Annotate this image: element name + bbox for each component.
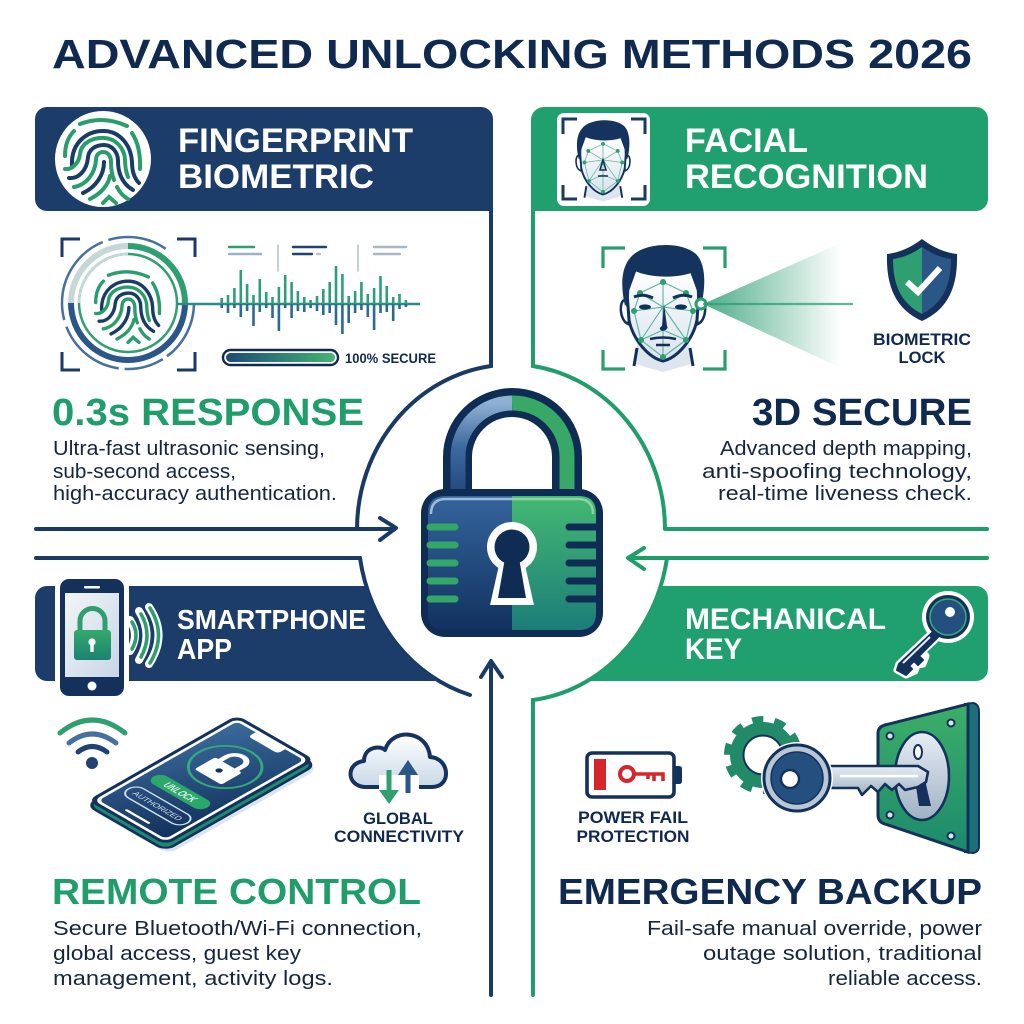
heading: smartphone app: APP <box>177 634 232 666</box>
illustration: face scan <box>603 245 725 372</box>
illustration: isometric smartphone: UNLOCK <box>160 781 200 804</box>
icon: fingerprint badge <box>55 111 151 207</box>
description: mechanical <box>647 918 982 990</box>
panel: fingerprint biometric <box>35 107 493 505</box>
progress bar: 100% secure: 100% SECURE <box>345 351 436 366</box>
heading: fingerprint biometric: BIOMETRIC <box>178 158 374 196</box>
arrow: fingerprint to lock <box>36 518 396 540</box>
description: mechanical: outage solution, traditional <box>703 943 982 965</box>
heading: smartphone app: SMARTPHONE <box>177 604 366 635</box>
icon: wireless waves <box>130 607 158 664</box>
stat: 0.3s response: 0.3s RESPONSE <box>52 392 364 434</box>
heading: fingerprint biometric: FINGERPRINT <box>178 122 413 160</box>
description: fingerprint: Ultra-fast ultrasonic sensing, <box>53 438 325 460</box>
legend: waveform ticks <box>229 245 406 271</box>
illustration: fingerprint scan ring <box>62 237 195 370</box>
illustration: key in lock plate <box>761 703 979 853</box>
description: mechanical: Fail-safe manual override, power <box>647 918 982 940</box>
heading: mechanical key <box>685 603 886 666</box>
heading: smartphone app <box>177 604 366 666</box>
description: facial: anti-spoofing technology, <box>702 461 972 483</box>
description: facial <box>702 438 972 505</box>
heading: mechanical key: MECHANICAL <box>685 603 886 636</box>
header bar: smartphone <box>35 586 439 681</box>
arrow: facial and key to lock <box>628 548 987 569</box>
description: smartphone: global access, guest key <box>53 943 301 965</box>
stat: 3d secure: 3D SECURE <box>752 392 972 434</box>
heading: facial recognition: FACIAL <box>685 122 808 160</box>
icon: battery with red key <box>587 753 682 797</box>
title: ADVANCED UNLOCKING METHODS 2026 <box>52 31 972 77</box>
label: biometric lock: LOCK <box>898 349 946 367</box>
heading: facial recognition: RECOGNITION <box>685 158 928 196</box>
label: biometric lock: BIOMETRIC <box>873 331 971 349</box>
chart: ultrasonic waveform <box>177 266 420 334</box>
header bar: mechanical <box>587 586 988 681</box>
illustration: isometric smartphone: AUTHORIZED <box>130 790 185 822</box>
icon: central padlock <box>421 388 603 637</box>
description: smartphone: Secure Bluetooth/Wi-Fi connection, <box>53 918 422 940</box>
header bar: facial <box>531 107 988 211</box>
arrow: smartphone to lock <box>481 661 502 995</box>
icon: phone with lock <box>55 575 129 700</box>
heading: mechanical key: KEY <box>685 633 742 666</box>
panel: smartphone app <box>35 575 464 990</box>
panel: facial recognition <box>531 107 988 505</box>
line: navy lower <box>36 556 360 560</box>
stat: remote control: REMOTE CONTROL <box>52 871 421 912</box>
progress bar: 100% secure <box>223 350 436 366</box>
icon: wifi signal <box>60 720 125 769</box>
description: smartphone <box>53 918 422 990</box>
label: global connectivity: GLOBAL <box>363 810 433 828</box>
description: smartphone: management, activity logs. <box>53 968 333 990</box>
label: global connectivity <box>334 810 464 846</box>
illustration: scan beam <box>703 243 853 368</box>
description: mechanical: reliable access. <box>828 968 982 990</box>
label: power fail protection <box>576 809 690 846</box>
stat: emergency backup: EMERGENCY BACKUP <box>558 871 982 912</box>
heading: facial recognition <box>685 122 928 196</box>
illustration: isometric smartphone <box>88 715 318 854</box>
description: fingerprint <box>53 438 337 505</box>
icon: cloud sync <box>350 735 446 804</box>
description: facial: Advanced depth mapping, <box>720 438 972 460</box>
heading: fingerprint biometric <box>178 122 413 196</box>
label: power fail protection: PROTECTION <box>576 828 690 846</box>
description: fingerprint: sub-second access, <box>53 461 236 483</box>
label: biometric lock <box>873 331 971 367</box>
connector lines and circle arcs <box>357 210 667 995</box>
description: fingerprint: high-accuracy authentication. <box>53 483 337 505</box>
icon: key on header <box>897 591 974 675</box>
line: green upper <box>667 527 987 531</box>
icon: shield check <box>887 239 957 321</box>
header bar: fingerprint <box>35 107 493 211</box>
icon: gear <box>728 720 798 790</box>
panel: mechanical key <box>558 586 988 990</box>
label: global connectivity: CONNECTIVITY <box>334 828 464 846</box>
icon: face in frame <box>557 113 650 206</box>
label: power fail protection: POWER FAIL <box>578 809 688 827</box>
description: facial: real-time liveness check. <box>718 483 972 505</box>
